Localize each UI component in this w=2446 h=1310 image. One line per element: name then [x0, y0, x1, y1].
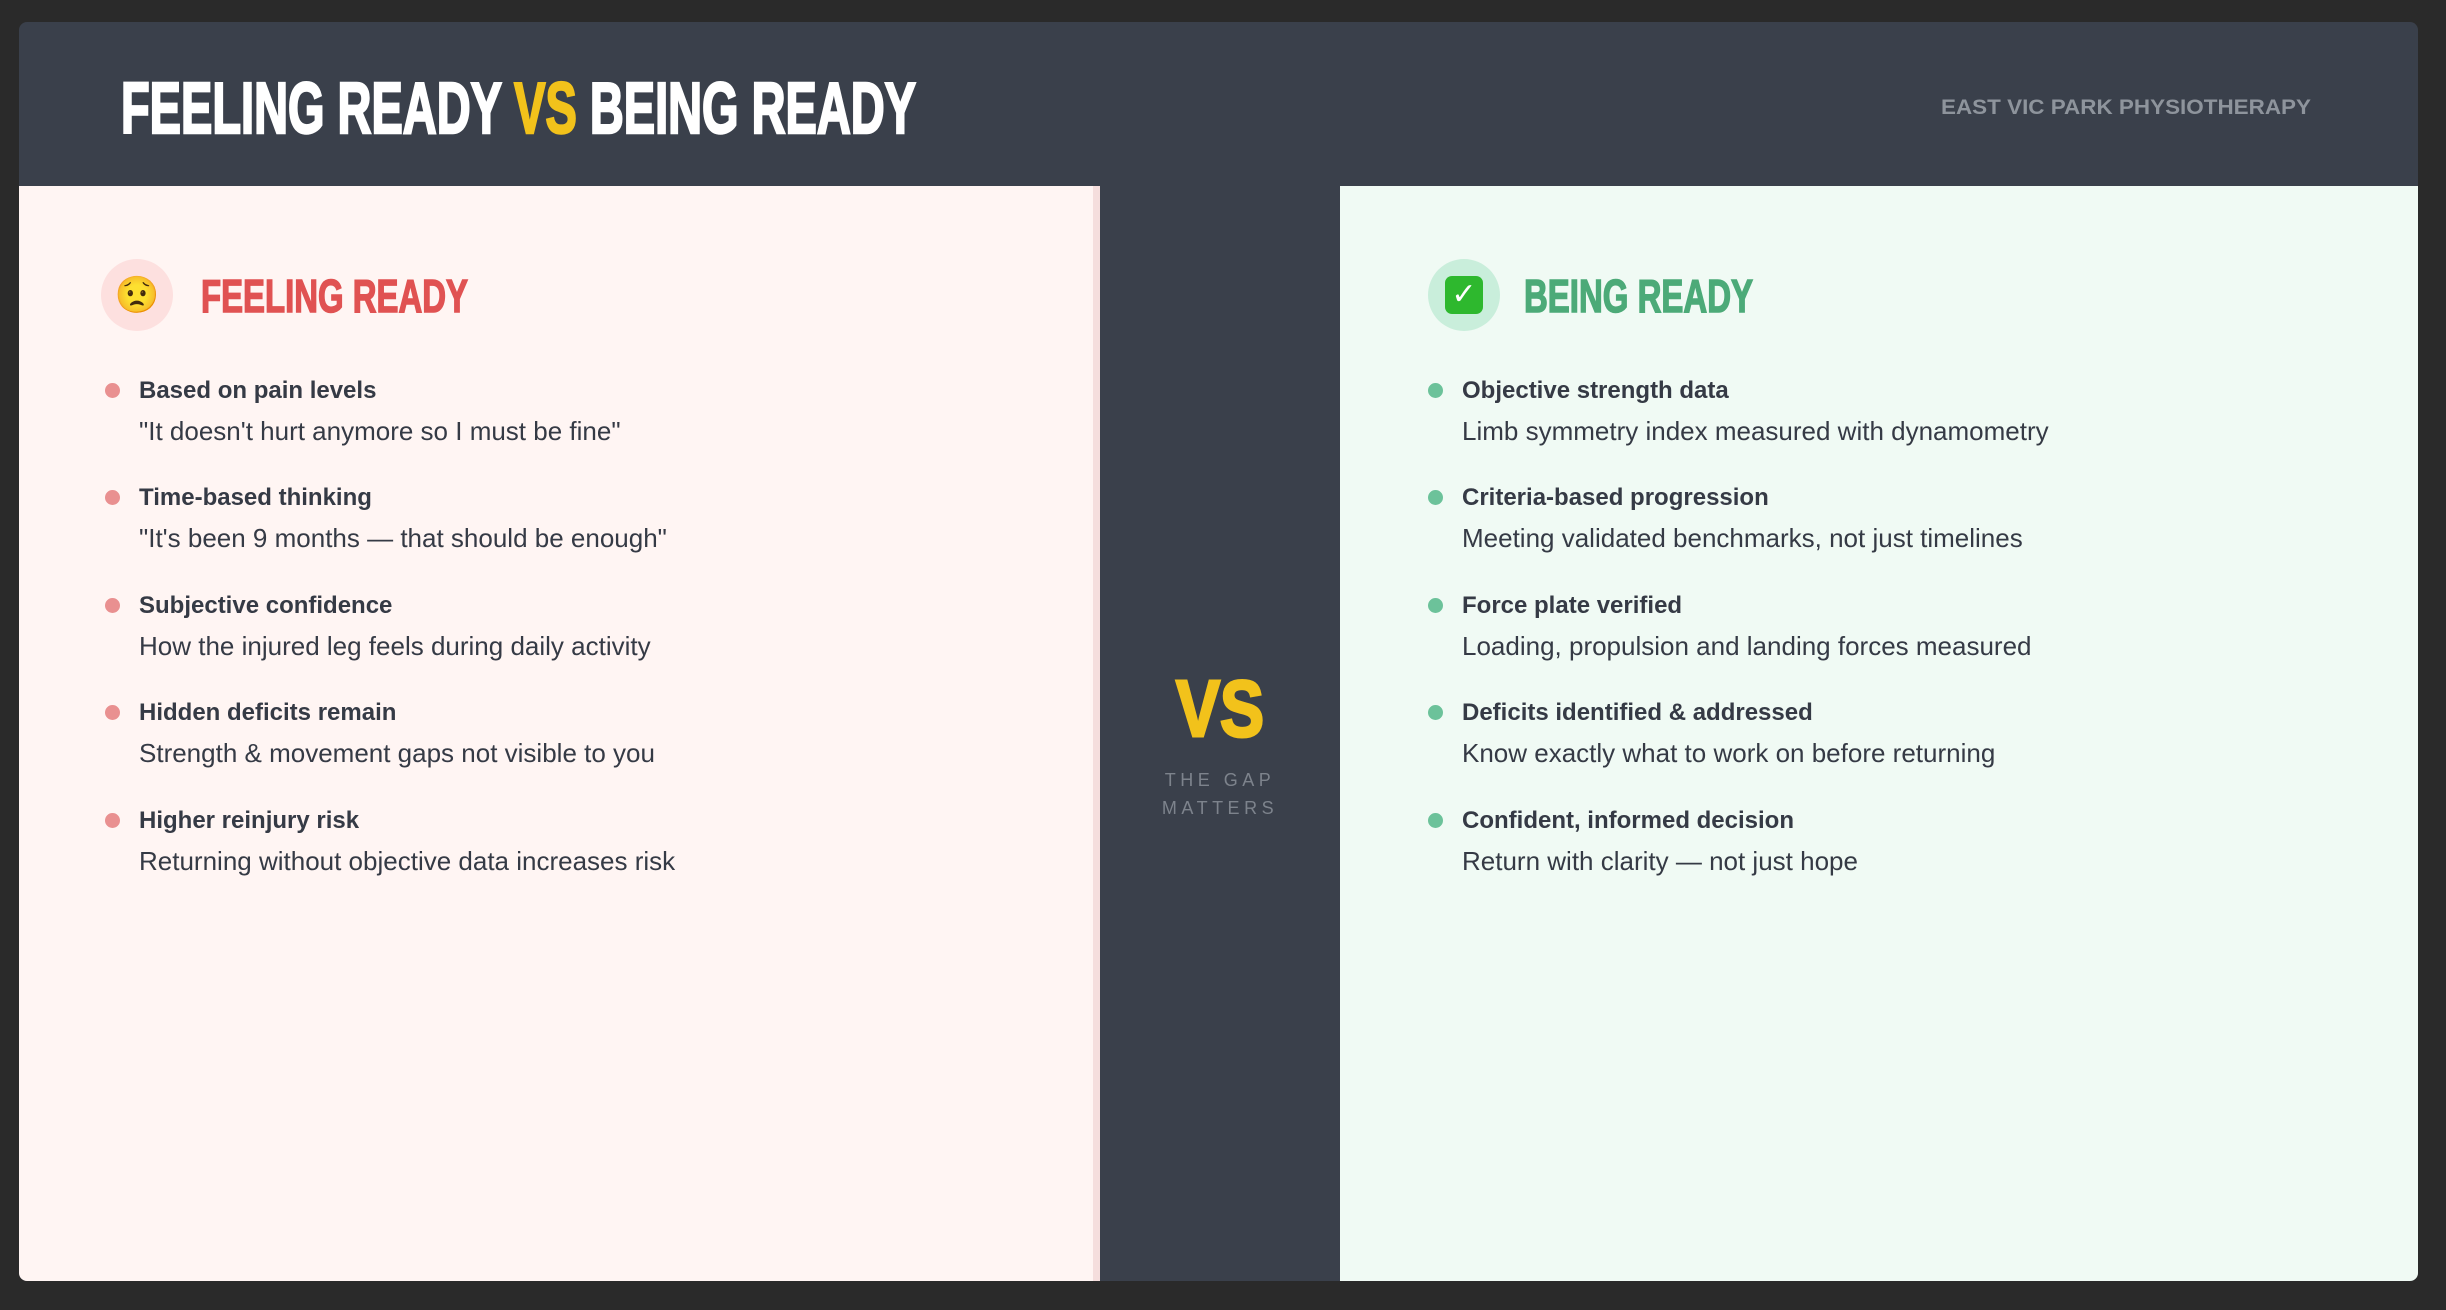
item 1: Objective strength data — [1462, 377, 1729, 404]
item 1: Based on pain levels — [139, 377, 376, 404]
item 2: Time-based thinking — [139, 484, 372, 511]
icon: worried face — [101, 259, 173, 331]
item 5: Return with clarity — not just hope — [1462, 846, 1858, 876]
item 5 — [1428, 807, 1858, 876]
icon: worried face: 😟 — [115, 274, 159, 316]
item 3 — [105, 592, 651, 661]
item 3: Force plate verified — [1462, 592, 1682, 619]
item 5 — [105, 807, 676, 876]
item 3 — [1428, 592, 2032, 661]
panel: being ready — [1340, 186, 2418, 1281]
item 1: Limb symmetry index measured with dynamometry — [1462, 416, 2049, 446]
item 3: Loading, propulsion and landing forces measured — [1462, 631, 2032, 661]
item 1: "It doesn't hurt anymore so I must be fine" — [139, 416, 621, 446]
caption: the gap matters: THE GAP — [1165, 770, 1275, 790]
item 4: Hidden deficits remain — [139, 699, 396, 726]
item 4: Know exactly what to work on before returning — [1462, 738, 1995, 768]
caption: the gap matters — [1162, 770, 1278, 818]
panel: feeling ready — [19, 186, 1100, 1281]
item 5: Higher reinjury risk — [139, 807, 359, 834]
item 3: Subjective confidence — [139, 592, 392, 619]
item 1 — [1428, 377, 2049, 446]
icon: check mark: ✓ — [1451, 277, 1477, 312]
vs divider — [1162, 670, 1278, 818]
list: feeling ready items — [105, 377, 676, 876]
caption: the gap matters: MATTERS — [1162, 798, 1278, 818]
item 2: Criteria-based progression — [1462, 484, 1769, 511]
item 4: Strength & movement gaps not visible to you — [139, 738, 655, 768]
item 2: Meeting validated benchmarks, not just timelines — [1462, 523, 2023, 553]
item 4 — [105, 699, 655, 768]
item 2: "It's been 9 months — that should be enough" — [139, 523, 667, 553]
list: being ready items — [1428, 377, 2049, 876]
icon: check mark — [1428, 259, 1500, 331]
subtitle: clinic name: EAST VIC PARK PHYSIOTHERAPY — [1941, 96, 2311, 119]
item 2 — [1428, 484, 2023, 553]
item 4: Deficits identified & addressed — [1462, 699, 1813, 726]
item 5: Confident, informed decision — [1462, 807, 1794, 834]
item 2 — [105, 484, 667, 553]
item 5: Returning without objective data increases risk — [139, 846, 675, 876]
item 4 — [1428, 699, 1995, 768]
item 3: How the injured leg feels during daily activity — [139, 631, 651, 661]
item 1 — [105, 377, 621, 446]
